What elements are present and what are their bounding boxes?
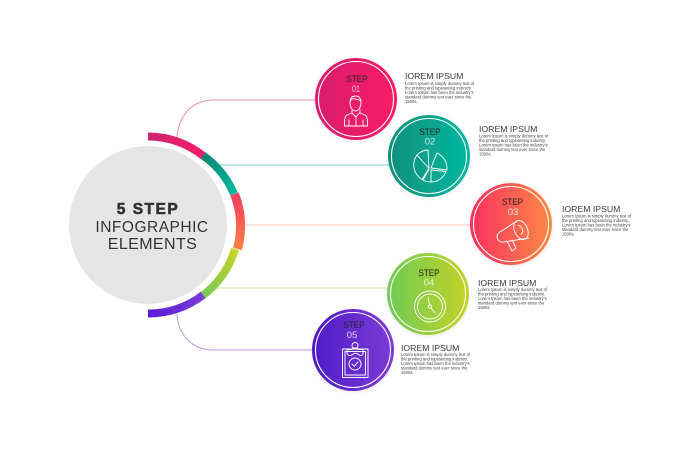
step 03 text: Lorem Ipsum has been the industry's <box>562 222 631 228</box>
arc segment: green <box>202 249 235 296</box>
icon: megaphone <box>497 218 531 251</box>
step 01 node <box>315 58 397 140</box>
icon: clipboard <box>342 342 368 378</box>
connector: step 05 <box>177 314 314 350</box>
connector: step 01 <box>177 100 316 138</box>
step 01 text: IOREM IPSUM <box>405 71 463 81</box>
segmented arc ring <box>148 136 240 314</box>
connector: step 03 <box>243 224 472 226</box>
step 05 number: 05 <box>347 330 357 341</box>
step 02 label: STEP <box>420 127 440 138</box>
step 01 label: STEP <box>346 74 368 85</box>
step 03 text: IOREM IPSUM <box>562 204 620 214</box>
step 02 number: 02 <box>425 136 435 148</box>
step 01 number: 01 <box>352 84 360 95</box>
central title: ELEMENTS <box>108 236 197 253</box>
step 01 text: Lorem Ipsum has been the industry's <box>405 90 474 95</box>
step 03 text: 1500s. <box>562 232 575 236</box>
step 05 node <box>312 309 394 391</box>
step 02 node <box>388 115 470 197</box>
step 05 text: standard dummy text ever since the <box>401 366 468 370</box>
step 05 text <box>401 343 471 375</box>
step 04 text: 1500s. <box>478 305 491 310</box>
step 05 text: IOREM IPSUM <box>401 343 459 353</box>
arc segment: teal <box>203 156 234 194</box>
step 05 text: Lorem Ipsum has been the industry's <box>401 361 470 366</box>
central title <box>95 201 209 253</box>
central title: INFOGRAPHIC <box>95 219 209 236</box>
icon: pie chart <box>414 150 447 182</box>
arc segment: orange <box>234 194 240 249</box>
step 02 text: 1500s. <box>479 152 492 156</box>
step 01 text: standard dummy text ever since the <box>405 94 472 100</box>
step 03 text: Lorem Ipsum is simply dummy text of <box>562 214 632 218</box>
step 02 text: IOREM IPSUM <box>479 124 537 134</box>
step 01 text <box>405 71 475 104</box>
step 02 text: Lorem Ipsum has been the industry's <box>479 142 548 148</box>
step 01 text: 1500s, <box>405 99 418 104</box>
step 03 label: STEP <box>502 197 523 208</box>
step 02 text <box>479 124 549 156</box>
step 04 text: Lorem Ipsum has been the industry's <box>478 296 547 301</box>
connector: step 02 <box>219 164 390 166</box>
step 03 text <box>562 204 632 236</box>
step 03 node <box>470 183 552 265</box>
icon: person <box>344 96 368 126</box>
arc segment: pink <box>148 136 204 156</box>
step 04 text: Lorem Ipsum is simply dummy text of <box>478 287 548 292</box>
step 05 text: 1500s. <box>401 370 414 375</box>
step 02 text: Lorem Ipsum is simply dummy text of <box>479 134 549 138</box>
arc segment: purple <box>148 295 203 314</box>
step 04 node <box>387 253 469 335</box>
step 02 text: the printing and typesetting industry. <box>479 138 546 143</box>
connector: step 04 <box>215 287 388 289</box>
step 05 label: STEP <box>344 320 364 331</box>
step 01 text: the printing and typesetting industry. <box>405 86 472 90</box>
icon: clock <box>414 291 446 322</box>
step 02 text: standard dummy text ever since the <box>479 147 546 152</box>
step 03 text: the printing and typesetting industry. <box>562 218 629 223</box>
step 03 number: 03 <box>508 207 518 218</box>
step 04 label: STEP <box>418 268 440 279</box>
step 05 text: Lorem Ipsum is simply dummy text of <box>401 352 471 357</box>
step 04 text <box>478 278 548 310</box>
step 03 text: standard dummy text ever since the <box>562 227 629 232</box>
step 04 number: 04 <box>424 278 434 288</box>
central grey circle <box>69 146 227 304</box>
step 01 text: Lorem Ipsum is simply dummy text of <box>405 81 475 86</box>
step 05 text: the printing and typesetting industry. <box>401 356 468 362</box>
step 04 text: IOREM IPSUM <box>478 278 536 288</box>
step 04 text: standard dummy text ever since the <box>478 300 545 306</box>
central title: 5 STEP <box>117 201 179 218</box>
step 04 text: the printing and typesetting industry. <box>478 292 545 296</box>
